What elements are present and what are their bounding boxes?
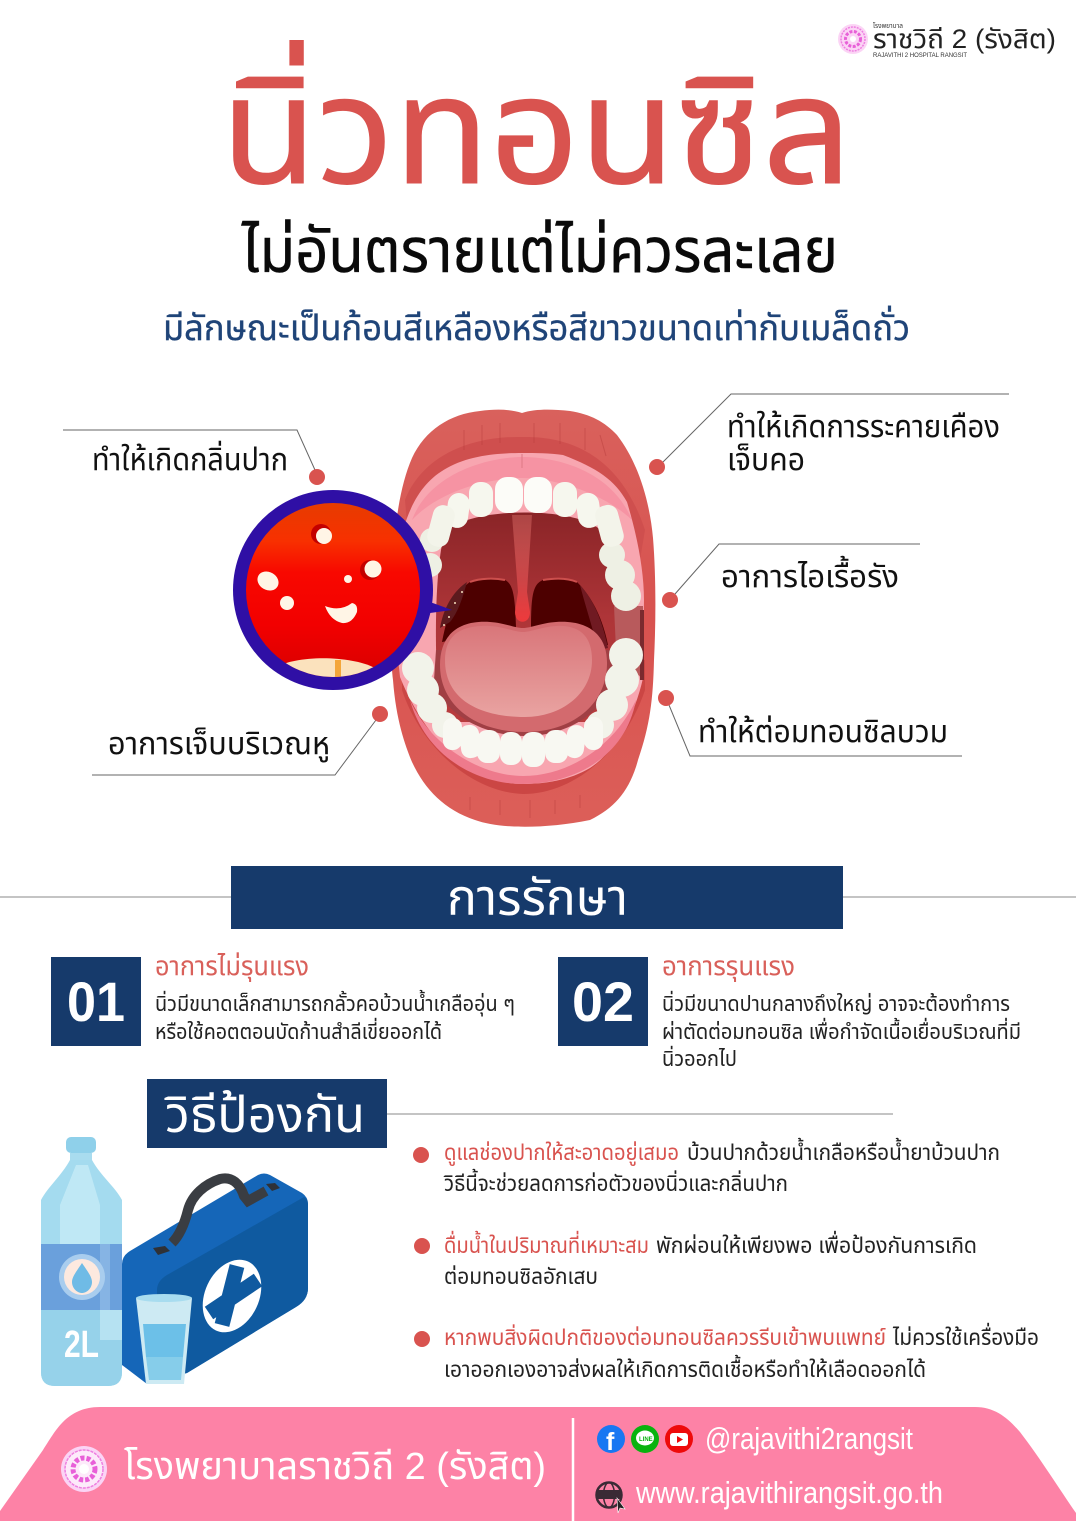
callout: ear pain: อาการเจ็บบริเวณหู [108, 726, 330, 762]
callout: sore throat: ทำให้เกิดการระคายเคือง [727, 409, 1000, 444]
treatment 01: 01 [67, 970, 125, 1033]
mouth cavity and palate [436, 512, 620, 722]
website: www.rajavithirangsit.go.th [635, 1475, 943, 1510]
callout: bad breath [63, 430, 325, 485]
tongue [434, 622, 616, 736]
callout: sore throat [649, 394, 1009, 477]
treatment 02 [558, 951, 1021, 1071]
prevention item 2 [414, 1230, 977, 1289]
footer hospital name: โรงพยาบาลราชวิถี 2 (รังสิต) [124, 1446, 546, 1488]
treatment 01: หรือใช้คอตตอนบัดก้านสำลีเขี่ยออกได้ [155, 1017, 442, 1044]
hospital logo top right: ราชวิถี 2 (รังสิต) [873, 24, 1056, 54]
treatment 02: 02 [572, 970, 634, 1033]
treatment 02: นิ่วมีขนาดปานกลางถึงใหญ่ อาจจะต้องทำการ [662, 990, 1010, 1016]
prevention item 2: พักผ่อนให้เพียงพอ เพื่อป้องกันการเกิด [656, 1230, 977, 1258]
upper teeth [418, 477, 641, 611]
prevention item 2: ต่อมทอนซิลอักเสบ [444, 1264, 598, 1289]
prevention item 1 [413, 1137, 1000, 1196]
heading: prevention: วิธีป้องกัน [164, 1087, 365, 1143]
uvula [512, 515, 532, 622]
hospital logo top right: RAJAVITHI 2 HOSPITAL RANGSIT [873, 53, 967, 59]
icon: line: LINE [639, 1437, 653, 1443]
prevention item 3: เอาออกเองอาจส่งผลให้เกิดการติดเชื้อหรือทำให้เลือดออกได้ [444, 1354, 926, 1382]
heading: prevention [147, 1079, 387, 1148]
callout: bad breath: ทำให้เกิดกลิ่นปาก [92, 440, 288, 477]
title: นิ่วทอนซิล [221, 40, 852, 215]
icon: first aid kit [122, 1174, 308, 1384]
hospital logo top right: โรงพยาบาล [873, 22, 903, 30]
callout: swollen tonsils: ทำให้ต่อมทอนซิลบวม [698, 714, 948, 749]
callout: swollen tonsils [658, 690, 962, 756]
throat [440, 579, 608, 650]
footer hospital logo [61, 1446, 107, 1492]
prevention item 3 [414, 1322, 1039, 1382]
lower teeth [402, 638, 643, 767]
icon: water bottle: 2L [64, 1324, 99, 1366]
icon: glass of water [136, 1294, 192, 1384]
callout: chronic cough [662, 544, 920, 608]
prevention item 1: วิธีนี้จะช่วยลดการก่อตัวของนิ่วและกลิ่นปาก [443, 1168, 788, 1196]
treatment 01: นิ่วมีขนาดเล็กสามารถกลั้วคอบ้วนน้ำเกลืออุ่น ๆ [155, 989, 515, 1017]
hospital logo top right [838, 22, 1056, 59]
magnified bubble [233, 490, 452, 690]
description line: มีลักษณะเป็นก้อนสีเหลืองหรือสีขาวขนาดเท่ากับเมล็ดถั่ว [163, 305, 910, 348]
heading: treatment [231, 866, 843, 929]
treatment 02: ผ่าตัดต่อมทอนซิล เพื่อกำจัดเนื้อเยื่อบริเวณที่มี [662, 1017, 1021, 1044]
prevention item 3: หากพบสิ่งผิดปกติของต่อมทอนซิลควรรีบเข้าพบแพทย์ [444, 1323, 886, 1350]
gums [396, 453, 644, 784]
subtitle: ไม่อันตรายแต่ไม่ควรละเลย [241, 217, 838, 286]
icon: youtube [665, 1425, 693, 1453]
footer band [0, 1407, 1076, 1521]
icon: facebook: f [606, 1428, 615, 1456]
prevention item 2: ดื่มน้ำในปริมาณที่เหมาะสม [444, 1230, 649, 1258]
icon: facebook [597, 1425, 625, 1456]
treatment 01 [51, 951, 515, 1046]
callout: chronic cough: อาการไอเรื้อรัง [721, 555, 899, 594]
prevention item 1: ดูแลช่องปากให้สะอาดอยู่เสมอ [444, 1140, 679, 1166]
prevention item 3: ไม่ควรใช้เครื่องมือ [892, 1322, 1039, 1350]
social handle: @rajavithi2rangsit [705, 1421, 913, 1456]
treatment 01: อาการไม่รุนแรง [155, 951, 309, 982]
treatment 02: อาการรุนแรง [662, 951, 795, 982]
illustration: open mouth [233, 410, 655, 827]
icon: web globe [596, 1482, 625, 1513]
callout: sore throat: เจ็บคอ [727, 442, 805, 477]
prevention item 1: บ้วนปากด้วยน้ำเกลือหรือน้ำยาบ้วนปาก [687, 1137, 1000, 1165]
heading: treatment: การรักษา [447, 870, 628, 926]
icon: line [631, 1425, 659, 1453]
icon: water bottle [41, 1137, 122, 1386]
callout: ear pain [92, 706, 388, 775]
treatment 02: นิ่วออกไป [662, 1045, 737, 1071]
